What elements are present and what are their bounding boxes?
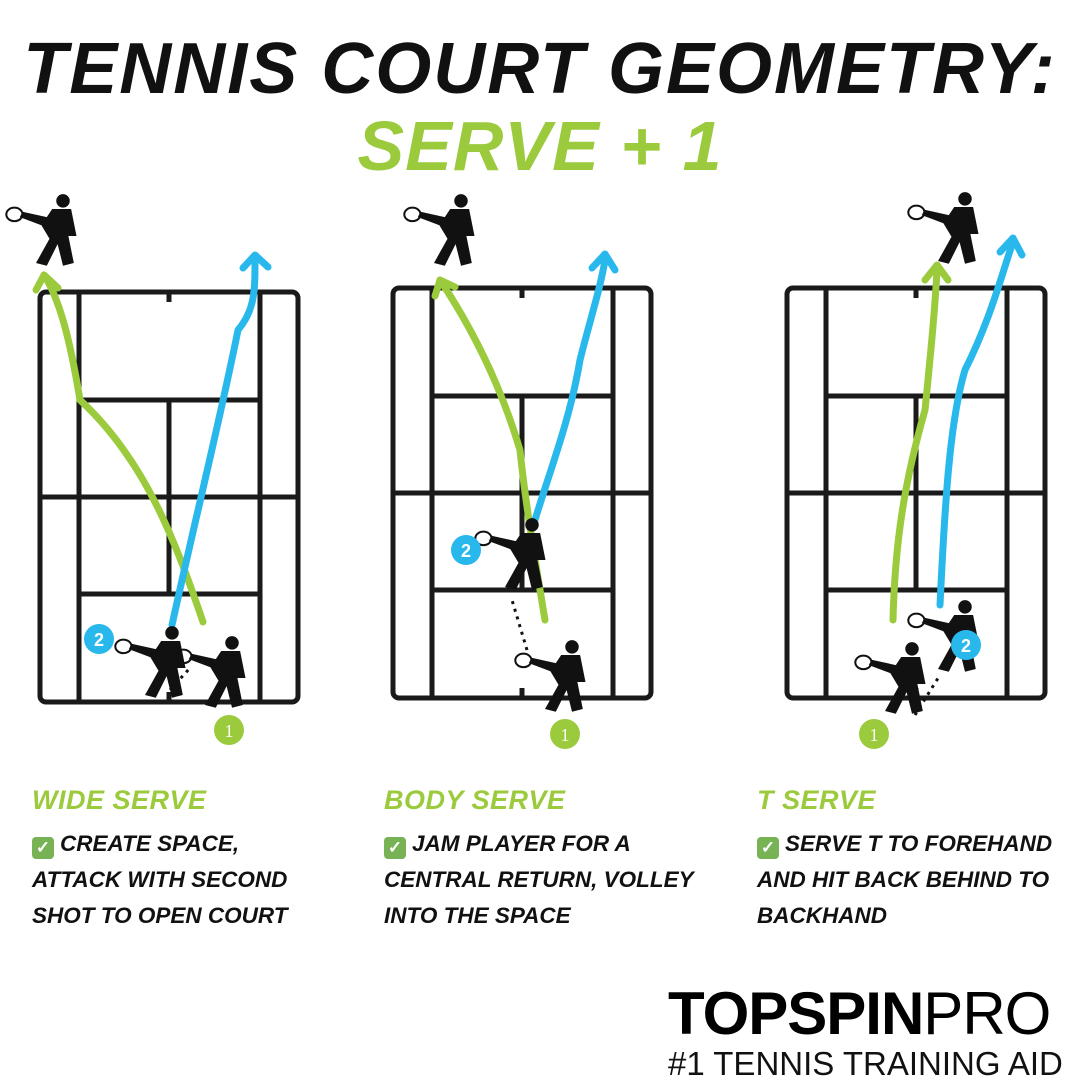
logo: TOPSPINPRO	[668, 980, 1050, 1047]
text: body serve: CENTRAL RETURN, VOLLEY	[384, 867, 694, 892]
text: t serve: BACKHAND	[757, 903, 887, 928]
text: body serve: ✓	[388, 838, 402, 857]
text: body serve: JAM PLAYER FOR A	[412, 831, 631, 856]
text: t serve: ✓	[761, 838, 775, 857]
court 3: T serve: 2	[961, 636, 971, 656]
court 2: body serve: 2	[461, 541, 471, 561]
text: body serve: BODY SERVE	[384, 785, 566, 815]
logo: #1 TENNIS TRAINING AID	[668, 1045, 1063, 1082]
subtitle: SERVE + 1	[357, 107, 722, 185]
text: t serve: SERVE T TO FOREHAND	[785, 831, 1052, 856]
text: wide serve: ✓	[36, 838, 50, 857]
text: t serve: T SERVE	[757, 785, 876, 815]
text: t serve	[756, 785, 1052, 928]
court 2: body serve: 1	[560, 725, 570, 745]
text: body serve	[384, 785, 696, 928]
court 1: wide serve	[6, 194, 298, 745]
logo	[668, 980, 1063, 1082]
text: body serve: INTO THE SPACE	[384, 903, 571, 928]
court 1: wide serve: 2	[94, 630, 104, 650]
text: wide serve	[32, 785, 290, 928]
title: TENNIS COURT GEOMETRY:	[23, 29, 1057, 109]
text: wide serve: ATTACK WITH SECOND	[32, 867, 287, 892]
court 2: body serve	[393, 194, 651, 749]
badge 1	[214, 715, 244, 745]
court 1: wide serve: 1	[224, 721, 234, 741]
text: wide serve: SHOT TO OPEN COURT	[32, 903, 287, 928]
court 3: T serve	[787, 192, 1045, 749]
text: wide serve: WIDE SERVE	[32, 785, 207, 815]
badge 2	[84, 624, 114, 654]
text: t serve: AND HIT BACK BEHIND TO	[757, 867, 1049, 892]
court 3: T serve: 1	[870, 725, 878, 745]
text: wide serve: CREATE SPACE,	[60, 831, 239, 856]
diagrams	[5, 192, 1048, 749]
